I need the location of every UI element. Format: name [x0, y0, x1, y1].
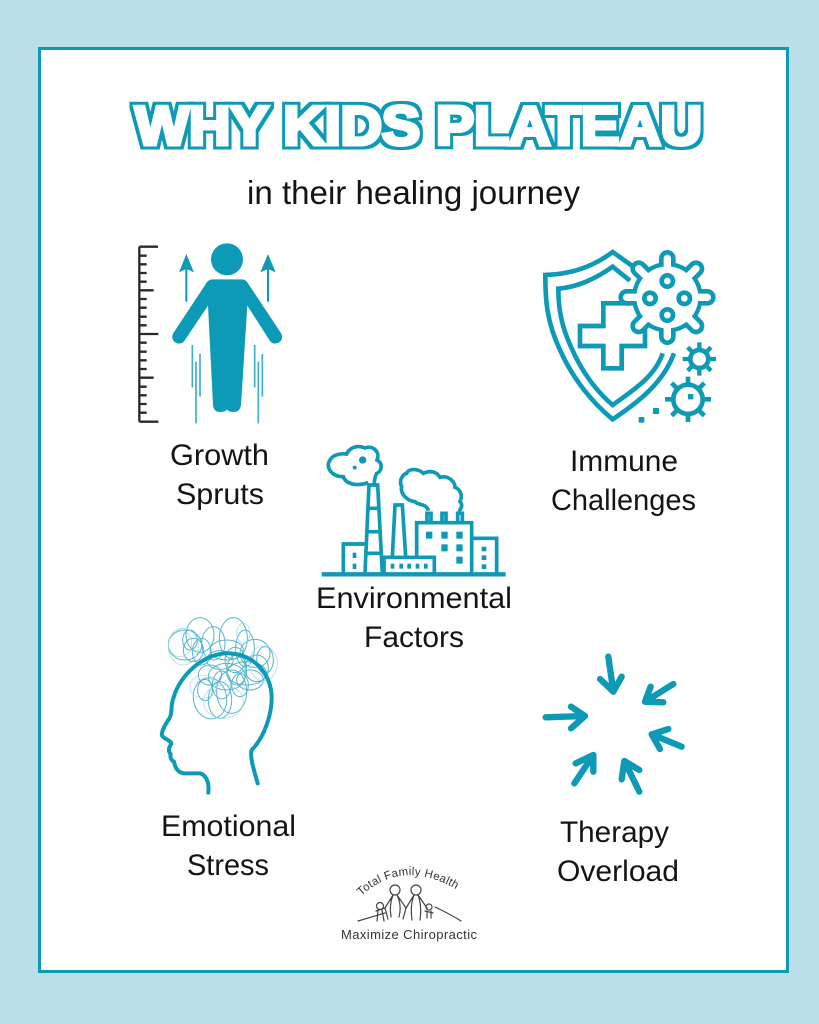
subtitle: in their healing journey — [247, 174, 581, 211]
cross — [580, 303, 645, 368]
label: therapy overload: Overload — [557, 855, 679, 888]
label: growth spurts: Spruts — [176, 478, 264, 511]
person — [172, 243, 282, 412]
label: immune challenges: Challenges — [551, 484, 696, 517]
label: immune challenges — [551, 445, 696, 517]
logo: Total Family Health — [341, 866, 478, 942]
icon: immune shield and viruses — [545, 252, 716, 423]
logo wordmark: Maximize Chiropractic — [341, 927, 478, 942]
label: environmental factors: Factors — [364, 621, 464, 654]
icon: inward arrows — [546, 657, 682, 792]
label: growth spurts: Growth — [170, 439, 269, 472]
motion lines — [192, 345, 262, 423]
icon: factory — [322, 447, 506, 574]
label: emotional stress: Emotional — [161, 810, 296, 843]
title: WHY KIDS PLATEAU — [135, 94, 702, 156]
label: environmental factors: Environmental — [316, 582, 512, 615]
shield — [545, 252, 674, 419]
logo family figures — [358, 885, 461, 921]
label: immune challenges: Immune — [570, 445, 678, 478]
small virus — [673, 385, 703, 414]
label: therapy overload — [557, 816, 679, 888]
growth arrows — [179, 254, 194, 302]
label: growth spurts — [170, 439, 269, 511]
icon: head with tangled scribbles — [162, 618, 277, 793]
logo curved text: Total Family Health — [356, 866, 458, 894]
icon: growth spurt figure with ruler — [139, 243, 282, 423]
label: therapy overload: Therapy — [560, 816, 669, 849]
label: emotional stress: Stress — [187, 849, 269, 882]
smoke clouds — [328, 447, 381, 485]
scribbles — [168, 618, 273, 722]
head outline — [162, 653, 272, 793]
ruler — [139, 247, 158, 422]
label: emotional stress — [161, 810, 296, 882]
label: environmental factors — [316, 582, 512, 654]
small gear virus — [690, 350, 708, 368]
large virus — [627, 258, 707, 337]
